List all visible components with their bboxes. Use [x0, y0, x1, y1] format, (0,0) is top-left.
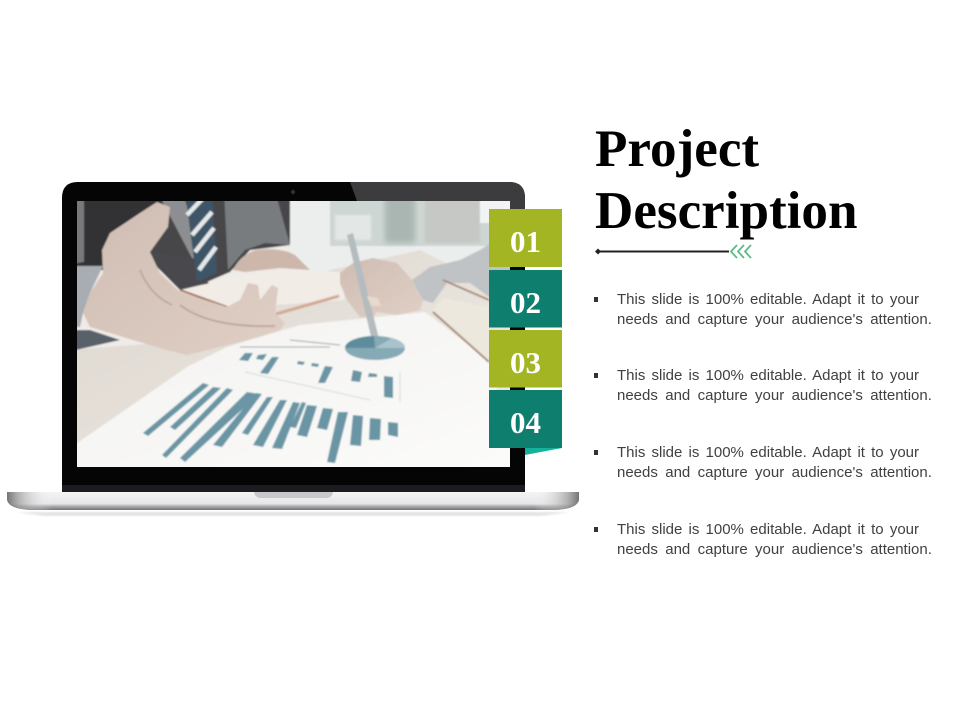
bullet 3: This slide is 100% editable. Adapt it to your: [617, 444, 919, 461]
bullet 2: [594, 367, 932, 404]
title divider with chevrons: [595, 245, 751, 258]
large hand: [83, 202, 285, 355]
far hand: [233, 249, 310, 272]
tie: [186, 201, 218, 282]
photo background: [290, 191, 520, 271]
title: [595, 120, 858, 240]
paper: [77, 312, 510, 467]
tab: 04: [489, 390, 562, 448]
bullet 4: needs and capture your audience's attention.: [617, 540, 932, 558]
laptop base: [7, 492, 579, 516]
open book: [182, 272, 344, 304]
tab: 03: 03: [510, 345, 541, 380]
writing hand and pen: [340, 232, 510, 337]
tab: 04: 04: [510, 405, 541, 440]
tab: 02: [489, 270, 562, 328]
tab: 03: [489, 330, 562, 388]
laptop: [7, 182, 579, 516]
document bar charts: [143, 353, 398, 463]
bullet 2: This slide is 100% editable. Adapt it to your: [617, 367, 919, 384]
number tab fold: [525, 448, 562, 455]
title: Project: [595, 120, 759, 178]
bullet 2: needs and capture your audience's attention.: [617, 386, 932, 404]
bullet 4: [594, 521, 932, 558]
laptop lid: [62, 182, 525, 492]
sleeve: [77, 264, 104, 328]
laptop with tab graphics: [7, 182, 752, 516]
bullet 1: [594, 291, 932, 328]
bullet 1: needs and capture your audience's attention.: [617, 310, 932, 328]
tab: 01: [489, 209, 562, 267]
pie chart on document: [345, 336, 405, 360]
webcam: [291, 190, 295, 194]
tab: 02: 02: [510, 285, 541, 320]
tab: 01: 01: [510, 224, 541, 259]
bullet 3: needs and capture your audience's attention.: [617, 464, 932, 480]
table: [77, 250, 502, 442]
bullet 4: This slide is 100% editable. Adapt it to your: [617, 521, 919, 538]
folder at right: [433, 298, 489, 362]
bullet 1: This slide is 100% editable. Adapt it to your: [617, 291, 919, 308]
screen photo: [77, 201, 510, 467]
bullet 3: [594, 444, 932, 480]
suit: [150, 201, 291, 290]
title: Description: [595, 182, 858, 240]
